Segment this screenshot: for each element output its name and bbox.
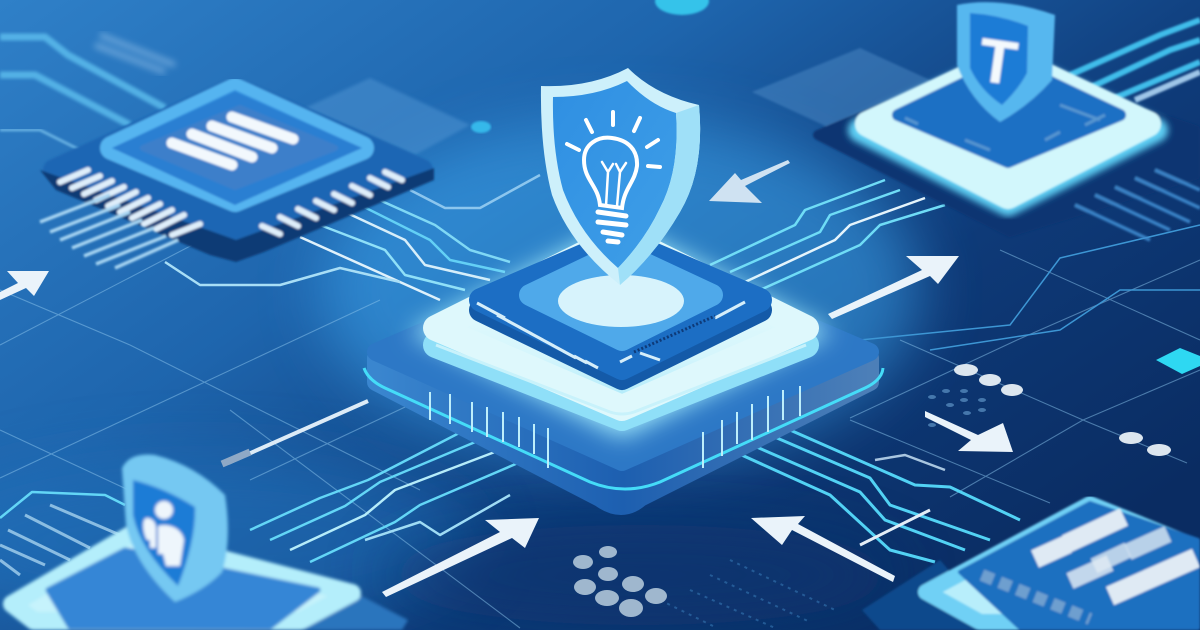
dotted module bottom centre (660, 560, 835, 628)
chip pins (982, 575, 1090, 619)
chip: bottom right (862, 503, 1198, 630)
cyan square marker right (1156, 348, 1200, 374)
pins on base (430, 386, 800, 468)
shield: people badge (122, 455, 228, 602)
main chip (364, 236, 883, 506)
arrow: left edge (0, 271, 49, 300)
chip: top right (752, 2, 1200, 240)
circuit trace: top left line (0, 130, 80, 150)
top plate (481, 246, 760, 378)
shield: T badge (957, 2, 1055, 122)
lower pin traces (40, 195, 178, 268)
arrow: right up (828, 256, 959, 319)
chip hatch marks (477, 302, 745, 368)
chip base (376, 244, 870, 506)
cyan rim (364, 368, 883, 489)
main shield with lightbulb (541, 68, 700, 285)
icon: lightbulb (567, 112, 660, 242)
circuit traces: bottom right (735, 430, 1020, 562)
striped module behind top left chip (305, 78, 491, 155)
circuit traces: top left to centre (165, 175, 540, 300)
top centre cyan marker (655, 0, 709, 15)
glow plate (436, 236, 806, 424)
icon: list bars (172, 117, 293, 165)
shield: T badge: T (974, 26, 1021, 99)
grid lines (0, 215, 1200, 628)
arrow: right down (925, 411, 1013, 452)
circuit traces: top right band (1070, 20, 1200, 100)
dots cluster (573, 364, 1171, 617)
arrows (0, 160, 1013, 597)
arrow: bottom left (751, 516, 895, 582)
circuit traces: top right (710, 180, 945, 290)
circuit traces: bottom left (0, 430, 525, 562)
glowing pad (558, 275, 684, 327)
dot grid (928, 389, 986, 427)
circuit traces: top left wide band (0, 37, 165, 125)
trace stripes: left of bottom chip (0, 505, 120, 575)
chip: bottom left (12, 455, 408, 630)
thin arrow: left of chip (222, 401, 368, 464)
thin lines: right side (860, 225, 1200, 545)
pin band right (1075, 170, 1200, 240)
chip: top left (40, 88, 434, 268)
chip pins (60, 170, 402, 235)
arrow: bottom up (382, 518, 539, 597)
blurred component: top left strip (95, 35, 175, 72)
arrow: top right of centre (709, 160, 790, 203)
